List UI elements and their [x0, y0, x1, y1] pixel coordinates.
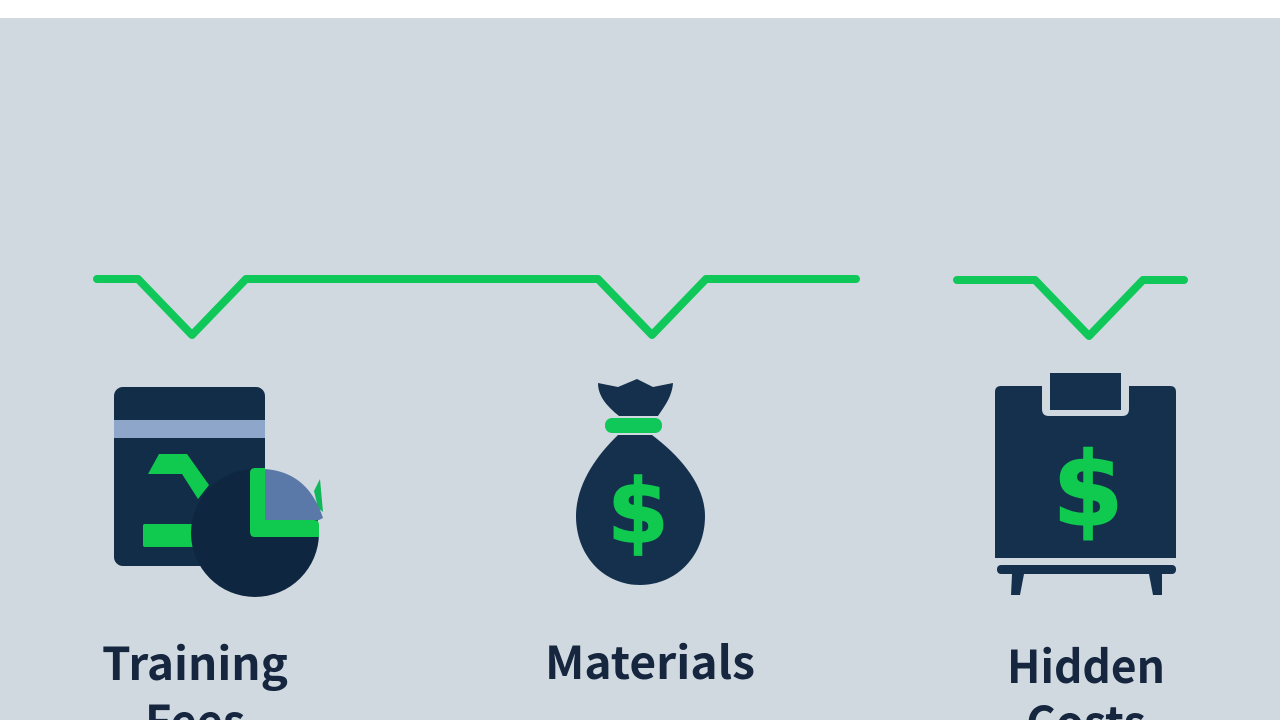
icon: money bag — [576, 379, 705, 585]
label: training fees — [102, 628, 288, 720]
zigzag line: hidden costs — [957, 280, 1184, 336]
icon: money bag: $ — [607, 460, 669, 563]
icon: board with dollar sign — [995, 373, 1176, 595]
icon: board with dollar sign: $ — [1053, 431, 1123, 550]
label: training fees: Training — [102, 628, 288, 693]
zigzag line: training fees and materials — [97, 279, 856, 335]
label: materials: Materials — [545, 627, 755, 692]
icon: training fee card with pie chart — [114, 387, 323, 597]
label: hidden costs: Hidden — [1007, 631, 1165, 696]
